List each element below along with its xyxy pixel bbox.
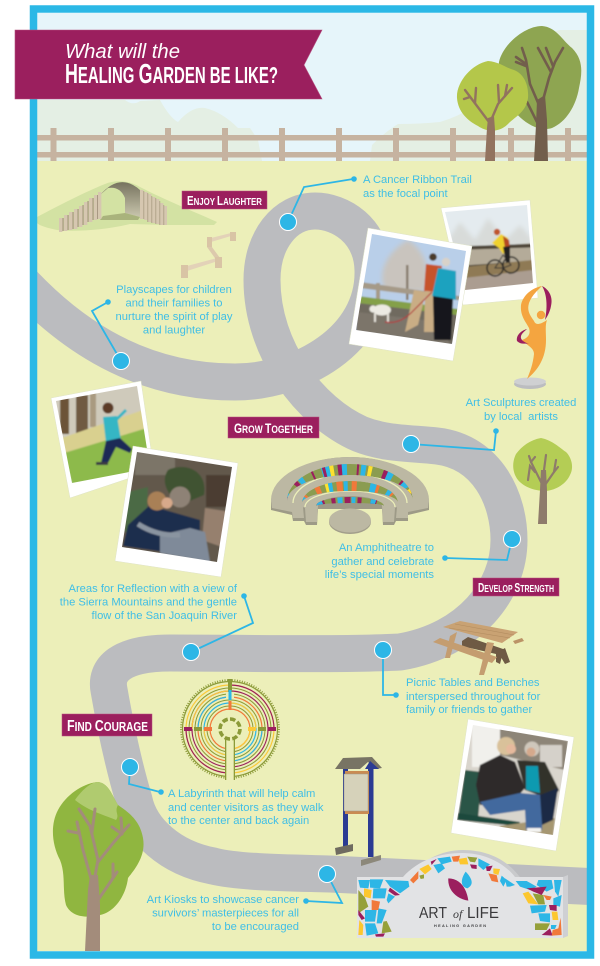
title banner bbox=[15, 30, 322, 99]
tag: develop strength: DEVELOP STRENGTH bbox=[478, 581, 554, 595]
bottom left tree bbox=[53, 782, 144, 951]
text: cancer ribbon trail: A Cancer Ribbon Trail bbox=[363, 174, 472, 186]
tag: grow together: GROW TOGETHER bbox=[234, 421, 313, 436]
text: picnic tables: family or friends to gather bbox=[406, 704, 532, 716]
tag: enjoy laughter bbox=[182, 191, 267, 209]
sign wordmark: HEALING GARDEN bbox=[434, 924, 486, 928]
connector: art sculptures bbox=[402, 428, 499, 452]
tag: develop strength bbox=[473, 578, 559, 596]
art sculpture bbox=[514, 286, 552, 389]
road: cancer ribbon trail bbox=[15, 211, 600, 887]
right small tree bbox=[513, 438, 572, 524]
sign wordmark bbox=[419, 907, 498, 927]
text: playscapes: and laughter bbox=[143, 324, 205, 336]
text: playscapes: nurture the spirit of play bbox=[116, 311, 233, 323]
amphitheatre bbox=[271, 457, 429, 534]
sign mosaic bbox=[358, 856, 562, 937]
distant hills bbox=[37, 30, 587, 161]
picnic table bbox=[433, 621, 524, 675]
text: picnic tables: Picnic Tables and Benches bbox=[406, 677, 540, 689]
text: areas for reflection: Areas for Reflection with a view of bbox=[68, 583, 238, 595]
text: labyrinth: A Labyrinth that will help calm bbox=[168, 788, 315, 800]
tag: enjoy laughter: ENJOY LAUGHTER bbox=[187, 194, 263, 208]
sign logo bbox=[448, 872, 472, 901]
text: art kiosks: to be encouraged bbox=[212, 921, 299, 933]
text: art sculptures: Art Sculptures created bbox=[466, 397, 576, 409]
sign wordmark: LIFE bbox=[467, 905, 499, 922]
text: areas for reflection: the Sierra Mountains and the gentle bbox=[60, 596, 237, 608]
text: picnic tables: interspersed throughout for bbox=[406, 691, 541, 703]
art kiosk bbox=[335, 757, 382, 866]
text: labyrinth: and center visitors as they walk bbox=[168, 802, 324, 814]
connector: cancer ribbon trail bbox=[280, 176, 357, 230]
labyrinth bbox=[181, 679, 279, 780]
grass ground bbox=[37, 161, 587, 951]
sign wordmark: of bbox=[453, 907, 464, 921]
sky background bbox=[37, 13, 587, 163]
text: labyrinth: to the center and back again bbox=[168, 815, 309, 827]
text: art kiosks: Art Kiosks to showcase cancer bbox=[147, 894, 299, 906]
art of life entry sign bbox=[357, 850, 568, 938]
photo: couple walking dog bbox=[349, 228, 472, 361]
tunnel playscape bbox=[37, 181, 217, 232]
title banner: What will the bbox=[65, 40, 180, 63]
text: areas for reflection: flow of the San Joaquin River bbox=[91, 610, 237, 622]
photo: two women hugging bbox=[115, 445, 240, 577]
tag: find courage bbox=[62, 714, 152, 736]
text: art sculptures: by local artists bbox=[484, 411, 558, 423]
text: amphitheatre: gather and celebrate bbox=[331, 556, 434, 568]
tag: grow together bbox=[228, 417, 319, 438]
text: playscapes: and their families to bbox=[125, 298, 223, 310]
sign wordmark: ART bbox=[419, 905, 447, 922]
balance beam playscape bbox=[181, 232, 236, 278]
title banner: HEALING GARDEN BE LIKE? bbox=[65, 58, 278, 89]
photo: cyclist bbox=[440, 200, 540, 305]
text: playscapes: Playscapes for children bbox=[116, 284, 232, 296]
text: art kiosks: survivors’ masterpieces for all bbox=[152, 908, 299, 920]
connector: labyrinth bbox=[122, 758, 164, 795]
connector: picnic tables bbox=[374, 642, 399, 698]
photo: boy running bbox=[50, 380, 155, 498]
text: amphitheatre: life’s special moments bbox=[325, 569, 434, 581]
fence bbox=[37, 128, 587, 161]
connector: areas for reflection bbox=[182, 593, 253, 660]
text: cancer ribbon trail: as the focal point bbox=[363, 188, 448, 200]
photo: seated couple bbox=[451, 719, 574, 851]
top right trees bbox=[457, 26, 581, 161]
connector: art kiosks bbox=[303, 866, 342, 904]
text: amphitheatre: An Amphitheatre to bbox=[339, 542, 434, 554]
connector: amphitheatre bbox=[442, 530, 520, 561]
tag: find courage: FIND COURAGE bbox=[67, 718, 148, 735]
connector: playscapes bbox=[92, 299, 130, 370]
